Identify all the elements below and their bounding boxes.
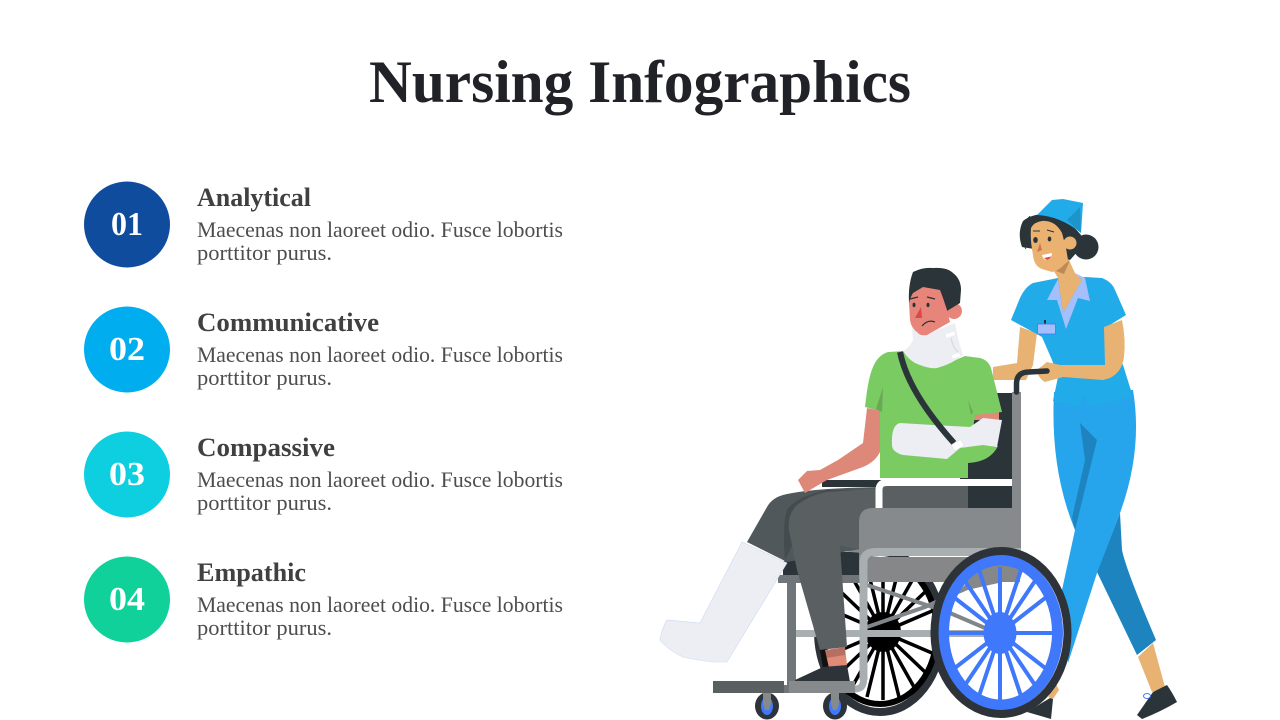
description: [197, 342, 563, 390]
patient neck brace: [903, 323, 963, 368]
heading: Empathic: Empathic: [197, 558, 306, 587]
leg cast: [660, 542, 787, 662]
number badge 04: [84, 556, 170, 642]
patient right forearm: [973, 412, 999, 420]
description: porttitor purus.: [197, 490, 332, 515]
description: [197, 592, 563, 640]
number badge 01: [84, 182, 170, 268]
footrests: [713, 681, 855, 693]
illustration: nurse pushing patient in wheelchair: [660, 199, 1177, 720]
description: porttitor purus.: [197, 365, 332, 390]
patient seated dark cushion: [783, 545, 870, 575]
wheelchair seat and upright: [855, 392, 1021, 689]
number badge 01: 01: [111, 206, 143, 243]
patient far thigh: [747, 487, 883, 562]
nurse rear arm: [993, 327, 1037, 380]
list item 03: Compassive: [84, 432, 563, 518]
description: Maecenas non laoreet odio. Fusce lobortis: [197, 592, 563, 617]
number badge 02: 02: [109, 331, 145, 368]
number badge 04: 04: [109, 581, 145, 618]
number badge 02: [84, 306, 170, 392]
patient near leg: [784, 488, 883, 682]
number badge 03: 03: [109, 456, 145, 493]
nurse head: [1020, 214, 1098, 272]
description: Maecenas non laoreet odio. Fusce lobortis: [197, 467, 563, 492]
wheelchair handle: [1016, 371, 1047, 392]
rear wheel of wheelchair: [818, 552, 942, 712]
heading: Communicative: Communicative: [197, 308, 379, 337]
nurse uniform top: [1011, 277, 1133, 407]
description: Maecenas non laoreet odio. Fusce lobortis: [197, 217, 563, 242]
wheelchair backrest: [822, 393, 1014, 509]
description: porttitor purus.: [197, 615, 332, 640]
list item 04: Empathic: [84, 556, 563, 642]
nurse front arm: [1037, 320, 1125, 382]
heading: Compassive: Compassive: [197, 433, 335, 462]
nurse badge: [1038, 320, 1056, 334]
arm cast: [892, 418, 1002, 459]
list item 02: Communicative: [84, 306, 563, 392]
description: [197, 217, 563, 265]
front wheel with blue rim and spokes: [934, 551, 1068, 714]
title: Nursing Infographics: [369, 49, 911, 115]
arm sling strap: [900, 352, 964, 451]
patient head: [909, 268, 962, 335]
patient shirt: [865, 351, 1002, 478]
nurse neck and collar: [1047, 258, 1090, 329]
number badge 03: [84, 432, 170, 518]
patient left arm: [798, 408, 882, 493]
description: porttitor purus.: [197, 240, 332, 265]
heading: Analytical: Analytical: [197, 183, 311, 212]
description: [197, 467, 563, 515]
description: Maecenas non laoreet odio. Fusce lobortis: [197, 342, 563, 367]
wheelchair front casters: [755, 692, 847, 720]
list item 01: Analytical: [84, 182, 563, 268]
wheelchair frame: [778, 575, 990, 690]
nurse cap: [1037, 199, 1083, 233]
nurse legs and shoes: [1027, 390, 1177, 719]
